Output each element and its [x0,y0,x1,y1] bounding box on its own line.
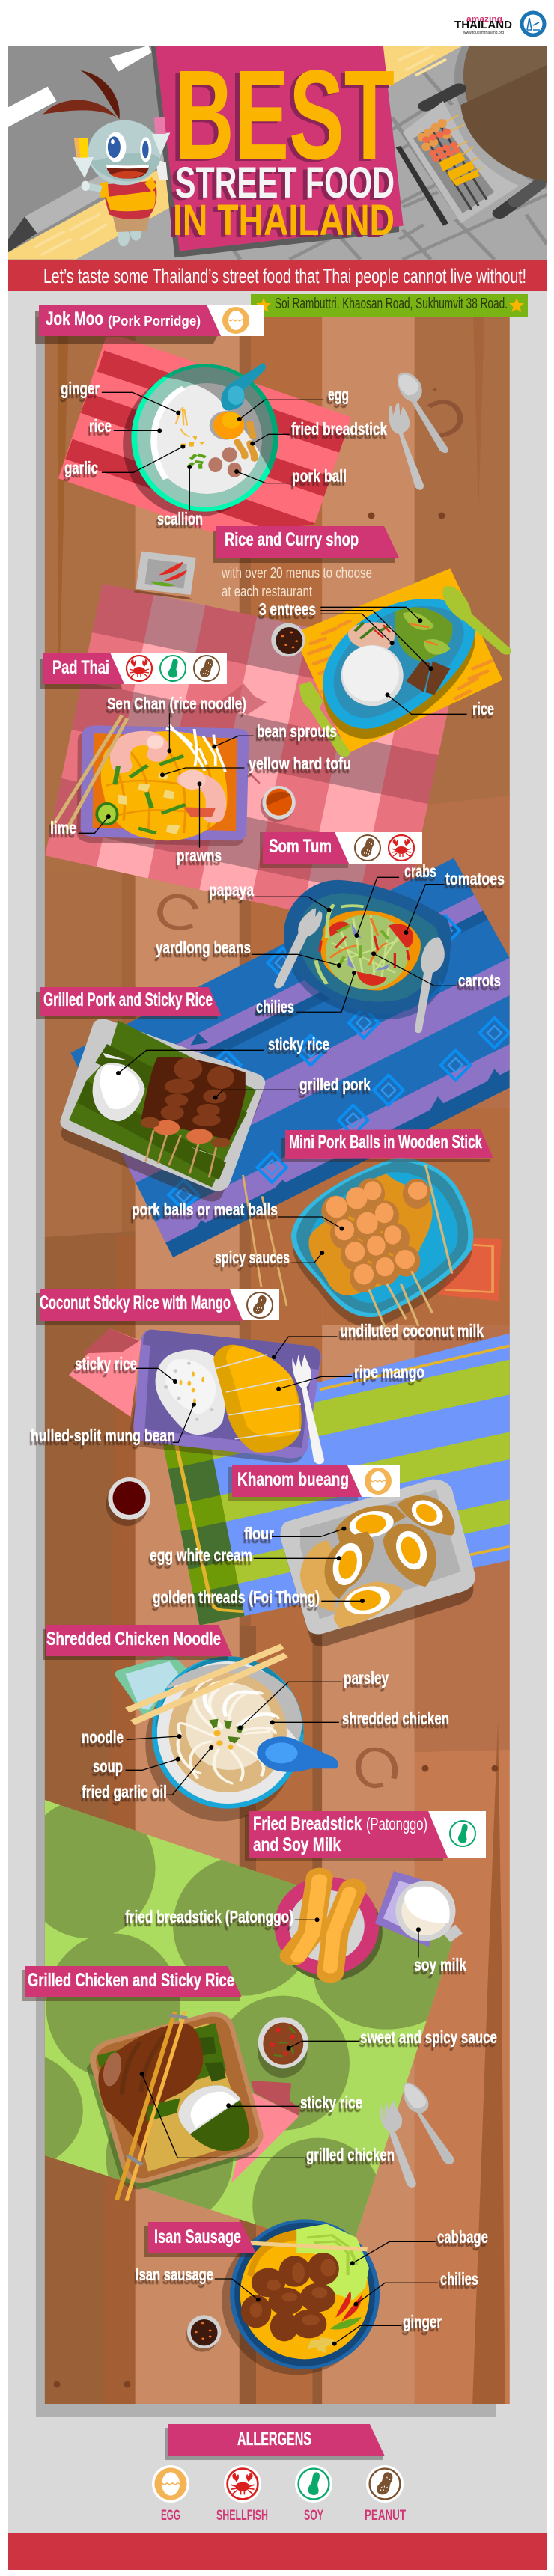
road [0,46,547,263]
ingredient labels [31,379,505,2331]
label: chilies: chilies [256,997,294,1016]
tray [81,725,249,840]
banner: Shredded Chicken Noodle [43,1625,232,1660]
cup [395,1881,455,1941]
crepe top right [398,1495,455,1536]
food: isan sausage [186,2219,380,2375]
label: carrots: carrots [458,971,501,990]
coffee ring middle [160,896,196,928]
stick [243,2243,368,2250]
banner title: Isan Sausage [154,2226,241,2247]
label: soup: soup [93,1756,123,1776]
icon: shellfish allergen [389,835,414,861]
note: menus text: at each restaurant [222,584,312,600]
allergens banner: ALLERGENS [237,2429,311,2450]
plate [291,1159,473,1317]
stall handles [425,88,459,106]
sauce bowl [258,2027,307,2078]
label: undiluted coconut milk: undiluted coconut milk [340,1321,484,1340]
label: ginger: ginger [403,2312,442,2331]
plate shadow [285,885,450,1019]
label: ripe mango: ripe mango [354,1362,424,1382]
food: grilled pork tray [60,1019,265,1201]
food: rice and curry plate [271,568,511,757]
icon: egg allergen [222,307,249,334]
title line: BEST: BEST [174,44,395,186]
label: pork balls or meat balls: pork balls or meat balls [132,1200,278,1219]
cup handle [443,1925,463,1942]
leaf [97,2023,226,2116]
tray [133,1330,321,1458]
breadstick [237,424,255,459]
label: fried breadstick: fried breadstick [291,419,387,439]
banner: Jok Moo [35,305,264,344]
logo: tourism authority seal [522,13,544,35]
wrapped rice [178,2085,249,2151]
mango [213,1345,302,1453]
logo: Amazing Thailand: amazing [466,15,502,24]
banner title line two: and Soy Milk [253,1834,341,1855]
label: rice: rice [472,699,494,718]
callouts: isan sausage [215,2279,438,2346]
banner title line one: Fried Breadstick [253,1813,362,1834]
food: mini pork balls [243,1159,502,1327]
food: khanom bueang [281,1480,475,1646]
label: garlic: garlic [64,458,98,477]
label: fried breadstick (Patonggo): fried breadstick (Patonggo) [125,1907,293,1926]
pink napkin [69,1328,141,1417]
bean sprouts [166,724,225,772]
label: soy milk: soy milk [414,1955,466,1974]
green fork [299,681,350,757]
title line: STREET FOOD: STREET FOOD [175,159,395,207]
green papaya [326,915,409,989]
fork [292,1355,324,1464]
pavement tile lines [226,73,547,260]
mascot skirt [112,215,150,232]
label: pork ball: pork ball [292,466,347,486]
mascot [43,70,170,246]
plate [284,880,451,1014]
crepe left [300,1540,335,1611]
banner title: Pad Thai [52,657,109,678]
title panel [156,46,404,251]
prawn two [187,780,216,816]
wooden table shadow [36,317,496,2417]
tray shadow [61,1031,262,1201]
mascot arms [88,183,103,192]
icon: soy allergen [450,1821,475,1846]
label: fried garlic oil: fried garlic oil [82,1782,167,1801]
spoon on table [398,373,448,453]
food: grilled chicken [87,2011,454,2201]
bowl rim [131,364,278,512]
banner: Isan Sausage [144,2222,256,2257]
screws [54,512,499,2387]
intro band [8,260,547,291]
banner title: Rice and Curry shop [225,529,359,550]
salad base [320,910,421,990]
tray shadow [87,2018,260,2189]
tablecloth: green polka [45,1800,454,2238]
coffee ring top [429,388,460,436]
legend: peanut [365,2465,406,2524]
banner: Grilled Pork and Sticky Rice [36,987,222,1019]
banner: Mini Pork Balls [281,1129,493,1162]
banner title: Som Tum [269,836,332,857]
plate [323,599,475,729]
chopsticks [53,715,127,834]
label: egg: egg [328,385,349,404]
label: cabbage: cabbage [437,2227,488,2247]
chilies [335,2291,362,2322]
location strip [251,294,528,317]
legend: soy: SOY [304,2508,323,2524]
title [173,44,395,245]
crabs [348,923,390,971]
label: egg white cream: egg white cream [150,1545,252,1565]
spoon [415,937,445,1033]
tray shadow [284,1492,473,1646]
curry dish three meat [406,660,450,695]
icon: peanut allergen [355,835,380,861]
food: som tum [274,880,451,1033]
curb [24,153,164,234]
sticks [369,1165,452,1327]
egg [210,411,243,440]
sauce dish [271,623,305,656]
banner: Som Tum [260,832,422,868]
wooden table [45,317,510,2404]
label: 3 entrees: 3 entrees [259,599,316,619]
icon: star right [509,298,524,312]
mascot legs [118,231,130,247]
food: pad thai [53,715,296,846]
icon: egg allergen [365,1468,392,1495]
note: menus text: with over 20 menus to choose [221,565,372,582]
plate shadow [222,2225,371,2375]
hero illustration [0,46,547,263]
fork [274,908,322,988]
bamboo sticks [117,2012,174,2200]
banner: Pad Thai [40,653,227,689]
ginger [307,2337,335,2353]
label: grilled chicken: grilled chicken [306,2145,395,2164]
noodles [178,1679,279,1783]
rice [156,1350,226,1435]
banner title: Khanom bueang [237,1469,349,1490]
bowl shadow [145,1667,296,1821]
noodles [101,731,228,840]
scallion [188,454,206,469]
legend: egg: EGG [161,2508,180,2524]
food: sauce bowl dark [106,1477,150,1526]
icon: star left [256,298,271,312]
garlic [181,436,206,448]
grill [403,101,519,223]
allergens legend [152,2424,406,2524]
parsley [209,1719,244,1743]
tray [90,2012,264,2183]
lime [95,802,118,825]
coffee ring lower [359,1749,395,1786]
napkin [115,1656,187,1715]
label: crabs: crabs [404,861,436,881]
road dashes [8,46,152,127]
label: Isan sausage: Isan sausage [136,2265,213,2284]
tray [281,1480,475,1635]
skewer sticks [146,1130,216,1177]
mascot head [88,120,161,185]
tablecloth: mango mat [163,1334,510,1625]
crepe upper [335,1505,406,1545]
banner title: Grilled Pork and Sticky Rice [43,989,213,1010]
spicy sauce [308,1173,433,1295]
tofu [118,773,180,834]
label: Sen Chan: Sen Chan (rice noodle) [107,694,246,713]
food: breadstick and soy milk [275,1871,463,1981]
banner title: Shredded Chicken Noodle [46,1629,221,1649]
sausages [241,2253,339,2341]
label: golden threads: golden threads (Foi Thong) [153,1587,320,1607]
label: flour: flour [244,1524,274,1543]
carrots and chilies [320,918,409,968]
banner: Grilled Chicken and Sticky Rice [22,1966,242,2001]
sauce dish [261,790,294,822]
spoon [404,2083,454,2164]
stall canopy [463,46,547,183]
label: scallion: scallion [157,509,203,528]
legend: peanut: PEANUT [365,2508,406,2524]
loose wooden sticks [243,1175,287,1306]
soup [168,1673,287,1792]
bowl shadow [123,371,269,517]
porridge [151,383,262,494]
logo: Amazing Thailand [454,15,512,35]
banner: Rice and Curry shop [213,526,399,563]
sticky rice [93,1063,144,1121]
legend: egg [152,2465,189,2524]
tomatoes [329,921,413,986]
tray shadow [130,1334,318,1463]
label: tomatoes: tomatoes [445,869,505,888]
label: sweet and spicy sauce: sweet and spicy sauce [360,2027,497,2047]
bowl [152,1656,304,1809]
pork skewers [141,1057,246,1140]
spoon [257,1736,338,1772]
logo: Amazing Thailand: www.tourismthailand.org [463,31,504,35]
banner title note: (Patonggo) [366,1814,427,1834]
papaya strips [316,904,364,984]
pavement [70,46,547,260]
legend: shellfish: SHELLFISH [216,2508,268,2524]
logo: Amazing Thailand: THAILAND [454,19,512,31]
orange napkin [438,1238,502,1301]
prawn one [120,738,159,766]
breadstick one [293,1877,320,1956]
label: yardlong beans: yardlong beans [156,938,251,957]
sauce dish [186,2318,219,2352]
breadstick two [330,1888,353,1974]
plate [278,1884,383,1981]
tablecloth: pad thai check [45,584,459,934]
callouts: mango and khanom bueang [136,1337,365,1603]
food: chili dish [134,552,196,600]
label: bean sprouts: bean sprouts [257,721,337,741]
chopsticks [127,1646,286,1723]
mascot shirt [103,181,156,219]
fork [380,2100,416,2188]
tray shadow [77,731,246,846]
legend: shellfish [216,2465,268,2524]
food: mango sticky rice [69,1328,324,1464]
callouts: grilled chicken [140,2041,436,2265]
title line: IN THAILAND: IN THAILAND [173,196,395,245]
tactile paving [8,46,463,260]
pink napkin [231,2093,299,2183]
mascot ice cream yellow [73,157,94,178]
mascot mouth [106,165,150,179]
wood details: rings and screws [54,388,499,2388]
title panel shadow [151,46,399,257]
label: noodle: noodle [82,1727,124,1747]
label: hulled-split mung bean: hulled-split mung bean [31,1426,175,1445]
fork on table [389,403,424,490]
ginger strands [176,407,190,436]
pork balls [321,1178,430,1292]
banner subtitle: (Pork Porridge) [108,314,201,329]
spoon [221,363,266,410]
icon: peanut allergen [247,1292,273,1318]
tablecloth: jok moo stripes [58,337,352,533]
green spoon [442,586,511,655]
legend: soy [295,2465,332,2524]
banner: Fried Breadstick and Soy Milk [245,1811,486,1861]
curry bowl: dish one [348,622,395,651]
label: sticky rice: sticky rice [75,1354,137,1373]
skewers [443,115,482,174]
mascot hair [43,100,117,117]
yellow mat [293,568,502,754]
label: spicy sauces: spicy sauces [215,1248,290,1267]
logos [454,13,544,35]
label: parsley: parsley [344,1668,389,1688]
chicken [98,2024,203,2155]
mascot eyes [106,132,126,162]
label: yellow hard tofu: yellow hard tofu [249,754,351,773]
label: ginger: ginger [61,379,100,398]
banner: Khanom bueang [228,1465,400,1501]
rice mound [341,645,404,706]
label: sticky rice: sticky rice [300,2093,362,2112]
label: chilies: chilies [440,2269,478,2289]
crepe bottom [334,1581,403,1628]
callouts: grilled pork and pork balls [116,1050,344,1263]
banner: Coconut Sticky Rice with Mango [36,1289,279,1325]
label: rice: rice [89,416,112,436]
callouts: pad thai and som tum [79,692,467,1012]
stall canopy rim [454,46,547,189]
label: prawns: prawns [177,846,222,865]
bowl shade [163,364,278,471]
plate [230,2219,380,2369]
chives [115,756,186,833]
label: sticky rice: sticky rice [268,1034,329,1054]
callouts: noodle and breadstick [125,1682,421,1958]
label: grilled pork: grilled pork [299,1075,371,1094]
food: shredded chicken noodle [115,1646,338,1821]
footer band [8,2533,547,2570]
banner title: Jok Moo [46,308,103,329]
callouts: jok moo [102,392,433,671]
pork balls [208,447,242,477]
label: shredded chicken: shredded chicken [342,1709,449,1728]
plate shadow [293,1169,472,1327]
label: lime: lime [50,818,76,837]
note: menus text [221,565,372,600]
label: papaya: papaya [209,880,254,900]
crepe right [383,1524,436,1587]
icon: shellfish allergen [127,656,152,681]
fried garlic [210,1730,233,1750]
tablecloth: som tum blue [70,858,510,1257]
allergens banner [165,2424,385,2460]
icon: peanut allergen [194,656,219,681]
yardlong beans [337,926,389,965]
banner title: Grilled Chicken and Sticky Rice [28,1970,234,1991]
leaf [69,1020,256,1188]
curry bowl: dish two greens [395,607,452,661]
mascot ice cream pink [152,132,170,155]
plate shadow [323,608,475,739]
banner title: Coconut Sticky Rice with Mango [40,1292,231,1313]
cabbage [296,2224,369,2300]
icon: soy allergen [160,656,186,681]
food: jok moo porridge [123,350,448,517]
tray [60,1019,265,1191]
soy milk napkin [375,1871,442,1947]
